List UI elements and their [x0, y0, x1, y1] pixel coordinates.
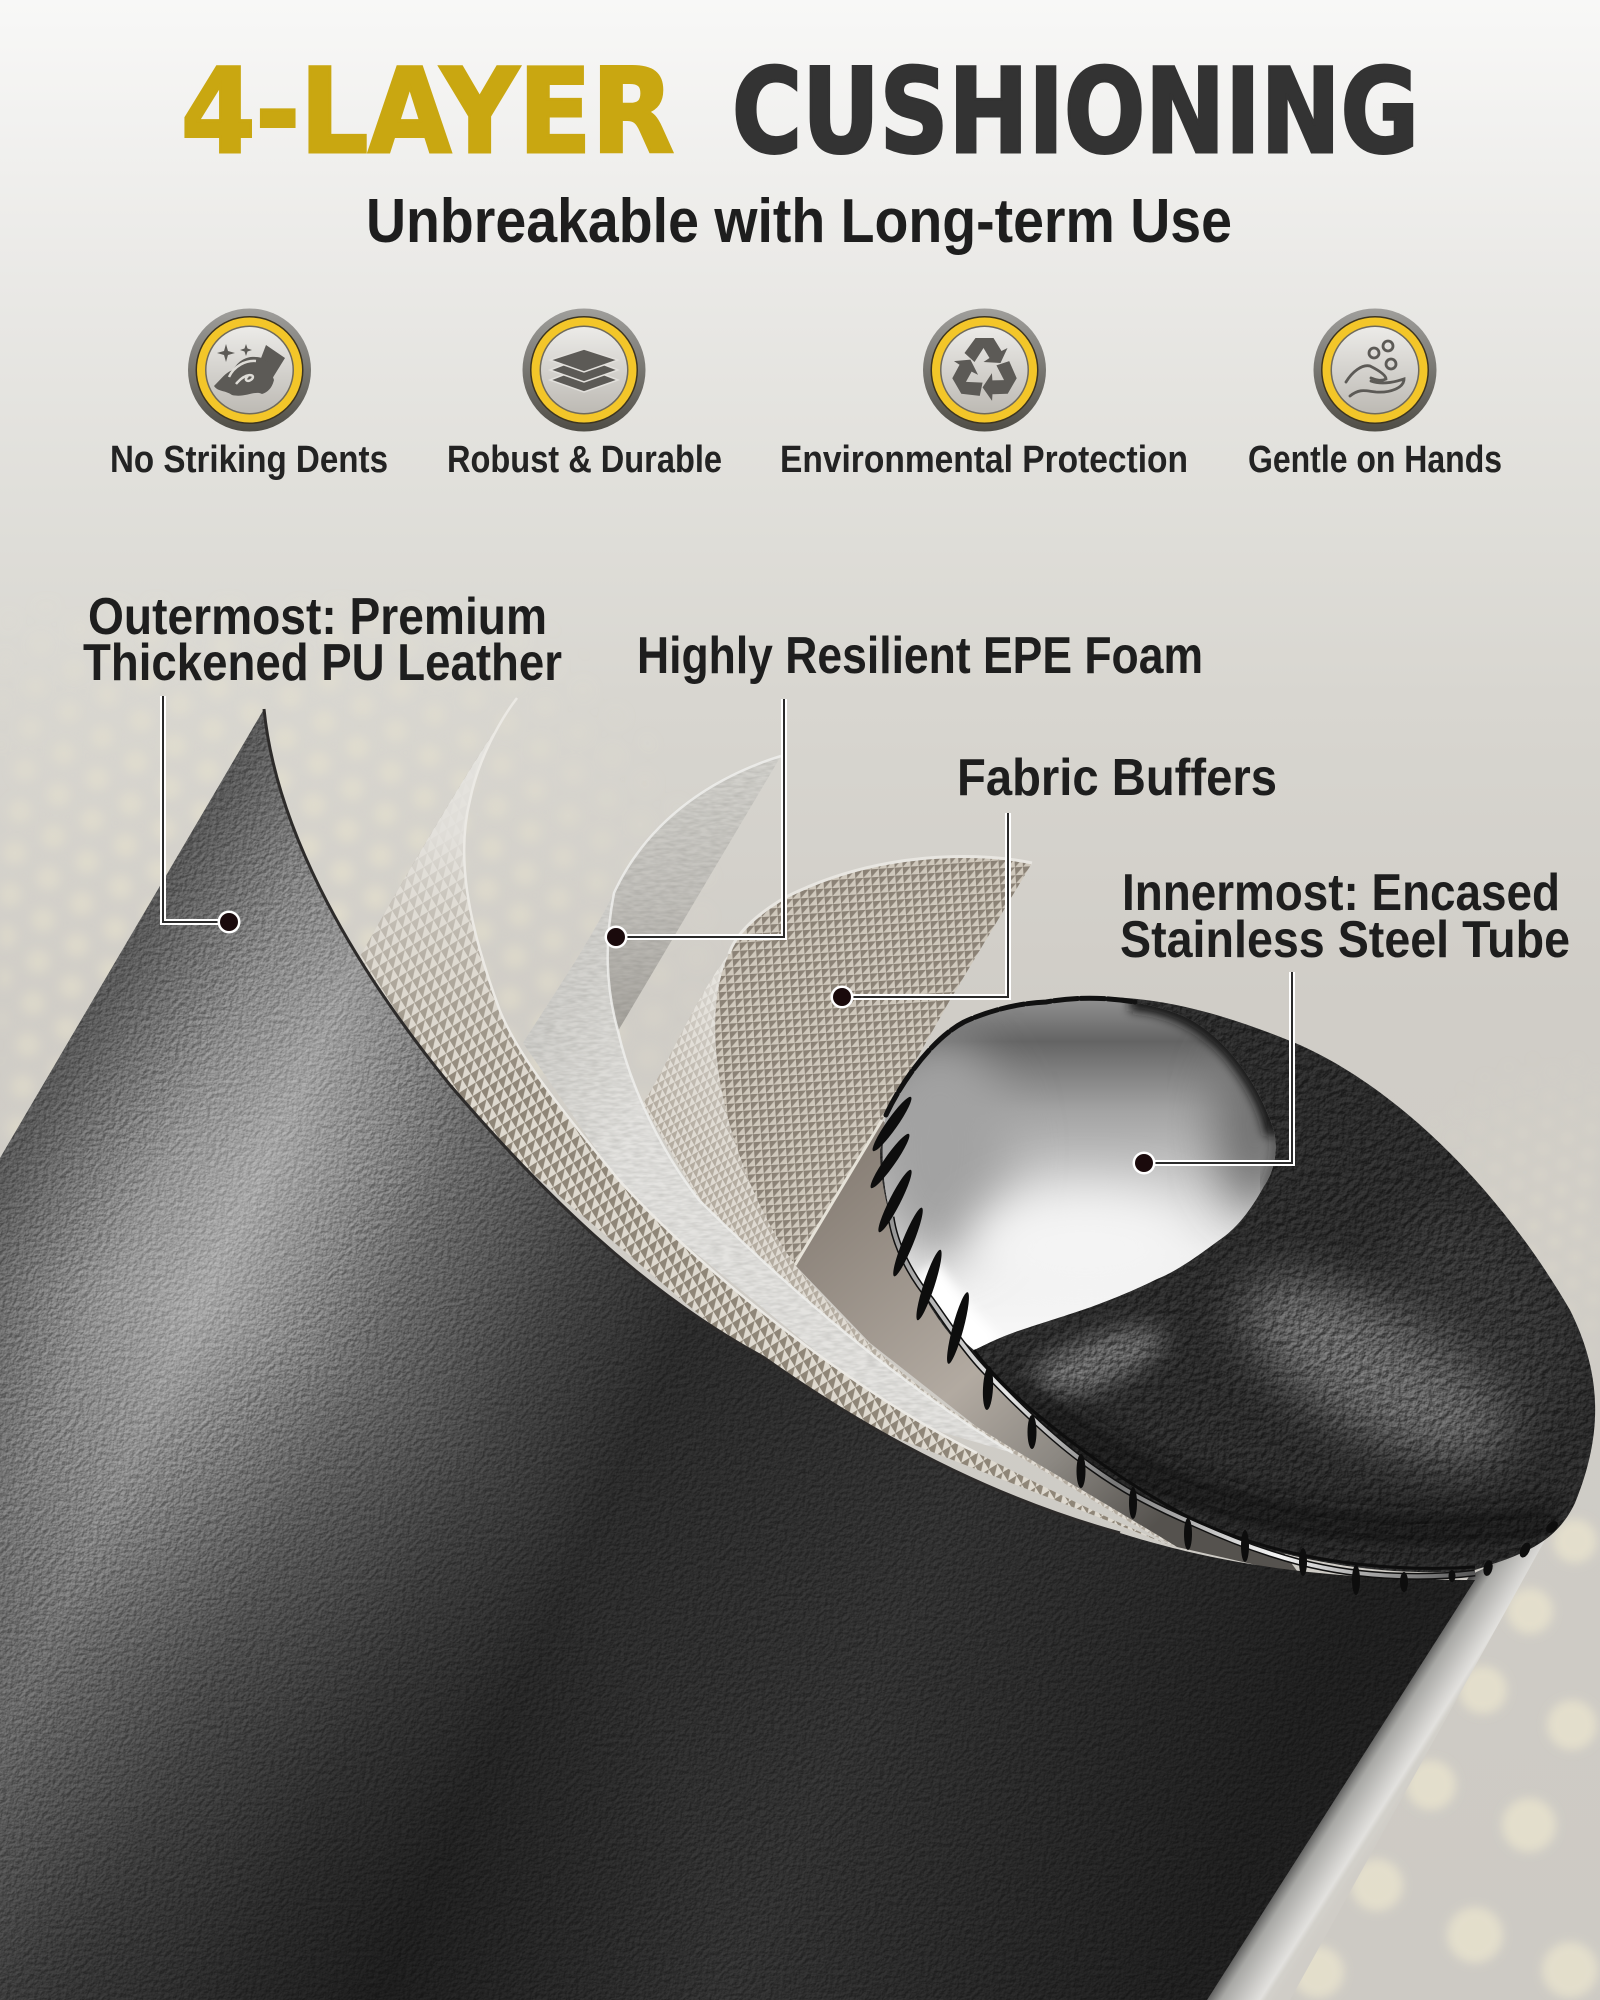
subtitle: Unbreakable with Long-term Use — [366, 187, 1232, 256]
icon: no striking dents — [188, 308, 311, 432]
title: CUSHIONING — [732, 43, 1419, 180]
callout: innermost steel tube — [1120, 864, 1570, 1174]
callout: fabric buffers: Fabric Buffers — [957, 749, 1277, 807]
chrome rim and stitching — [867, 998, 1560, 1595]
callout: outermost leather — [83, 588, 562, 934]
callout: outermost leather: Thickened PU Leather — [83, 634, 562, 692]
outer leather tube — [0, 700, 1500, 2000]
background glow dots — [0, 600, 1600, 1998]
callout: EPE foam — [604, 627, 1203, 948]
label: robust and durable: Robust & Durable — [447, 439, 722, 481]
icon: environmental protection recycle — [923, 308, 1046, 432]
layer 1: textured fabric — [357, 698, 1177, 1548]
layer 3: fabric buffer, inner face — [715, 856, 1032, 1265]
label: environmental protection: Environmental Protection — [780, 439, 1188, 481]
leather end cap — [870, 990, 1600, 1590]
inner taupe lining — [795, 1120, 1300, 1575]
icon: gentle on hands — [1314, 308, 1436, 432]
layer 2: EPE foam — [524, 755, 1014, 1454]
callout: fabric buffers — [830, 749, 1277, 1008]
title: 4-LAYER — [181, 43, 674, 180]
callout: outermost leather: Outermost: Premium — [88, 588, 547, 646]
label: no striking dents: No Striking Dents — [110, 439, 388, 481]
layer 3: fabric buffer, outer strip — [643, 954, 1177, 1547]
highlight ridge beside tube — [1200, 1540, 1545, 2000]
icon: robust and durable layers — [522, 308, 646, 432]
stainless steel tube — [882, 1000, 1276, 1350]
label: gentle on hands: Gentle on Hands — [1248, 439, 1502, 481]
callout: EPE foam: Highly Resilient EPE Foam — [637, 627, 1203, 685]
title — [181, 43, 1419, 180]
